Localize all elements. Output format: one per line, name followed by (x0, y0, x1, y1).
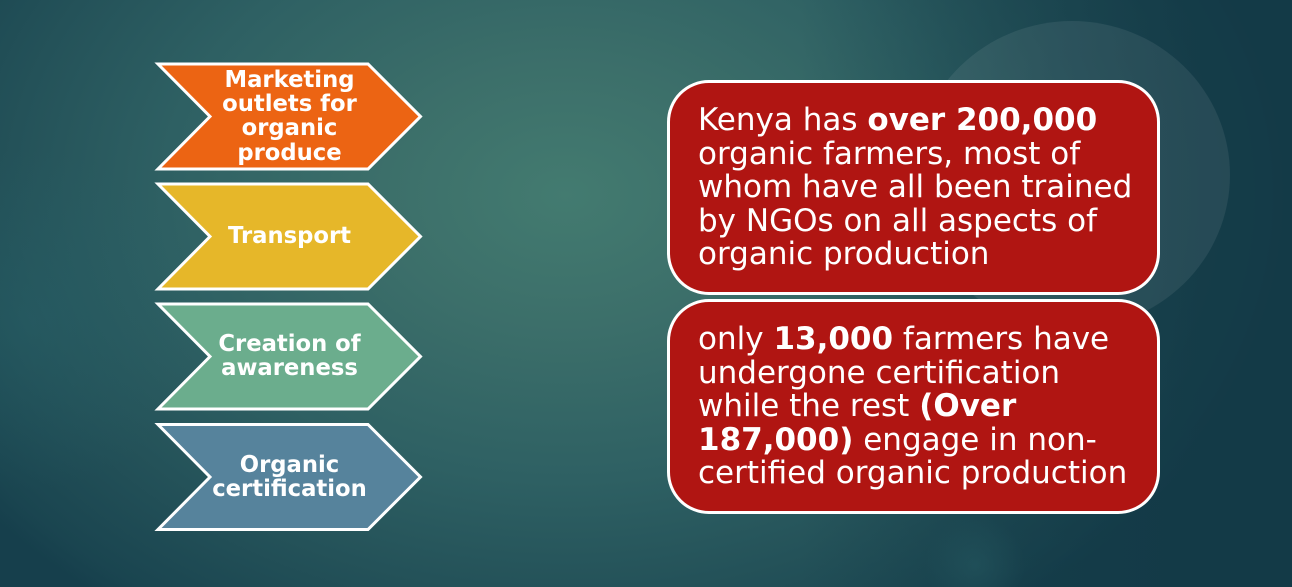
label: creation of awareness (218, 331, 361, 381)
text: total organic farmers: by NGOs on all aspects of (698, 202, 1097, 238)
label: transport: Transport (228, 223, 351, 249)
text: total organic farmers: organic farmers, most of (698, 136, 1080, 172)
label: organic certification: certification (212, 476, 367, 502)
text: total organic farmers (698, 102, 1132, 272)
text: certified farmers: certified organic production (698, 455, 1127, 491)
text: certified farmers: undergone certification (698, 354, 1060, 390)
label: creation of awareness: awareness (221, 355, 358, 381)
text: certified farmers: while the rest (Over (698, 388, 1016, 424)
chevron: marketing outlets (158, 64, 420, 169)
label: marketing outlets: produce (237, 140, 342, 166)
label: organic certification (212, 452, 367, 502)
chevron: organic certification (158, 424, 420, 530)
label: creation of awareness: Creation of (218, 331, 361, 357)
panel: total organic farmers (667, 80, 1160, 294)
text: certified farmers (698, 321, 1127, 491)
panel: certified farmers (667, 298, 1160, 514)
label: organic certification: Organic (240, 452, 339, 478)
chevron: transport (158, 184, 420, 289)
chevron: creation of awareness (158, 304, 420, 409)
label: marketing outlets: Marketing (225, 66, 354, 92)
text: total organic farmers: Kenya has over 200,000 (698, 102, 1097, 138)
label: marketing outlets: organic (242, 115, 337, 141)
label: marketing outlets (222, 66, 357, 166)
text: total organic farmers: organic production (698, 236, 989, 272)
label: marketing outlets: outlets for (222, 91, 357, 117)
text: certified farmers: only 13,000 farmers have (698, 321, 1109, 357)
text: certified farmers: 187,000) engage in non- (698, 422, 1097, 458)
text: total organic farmers: whom have all been trained (698, 169, 1132, 205)
